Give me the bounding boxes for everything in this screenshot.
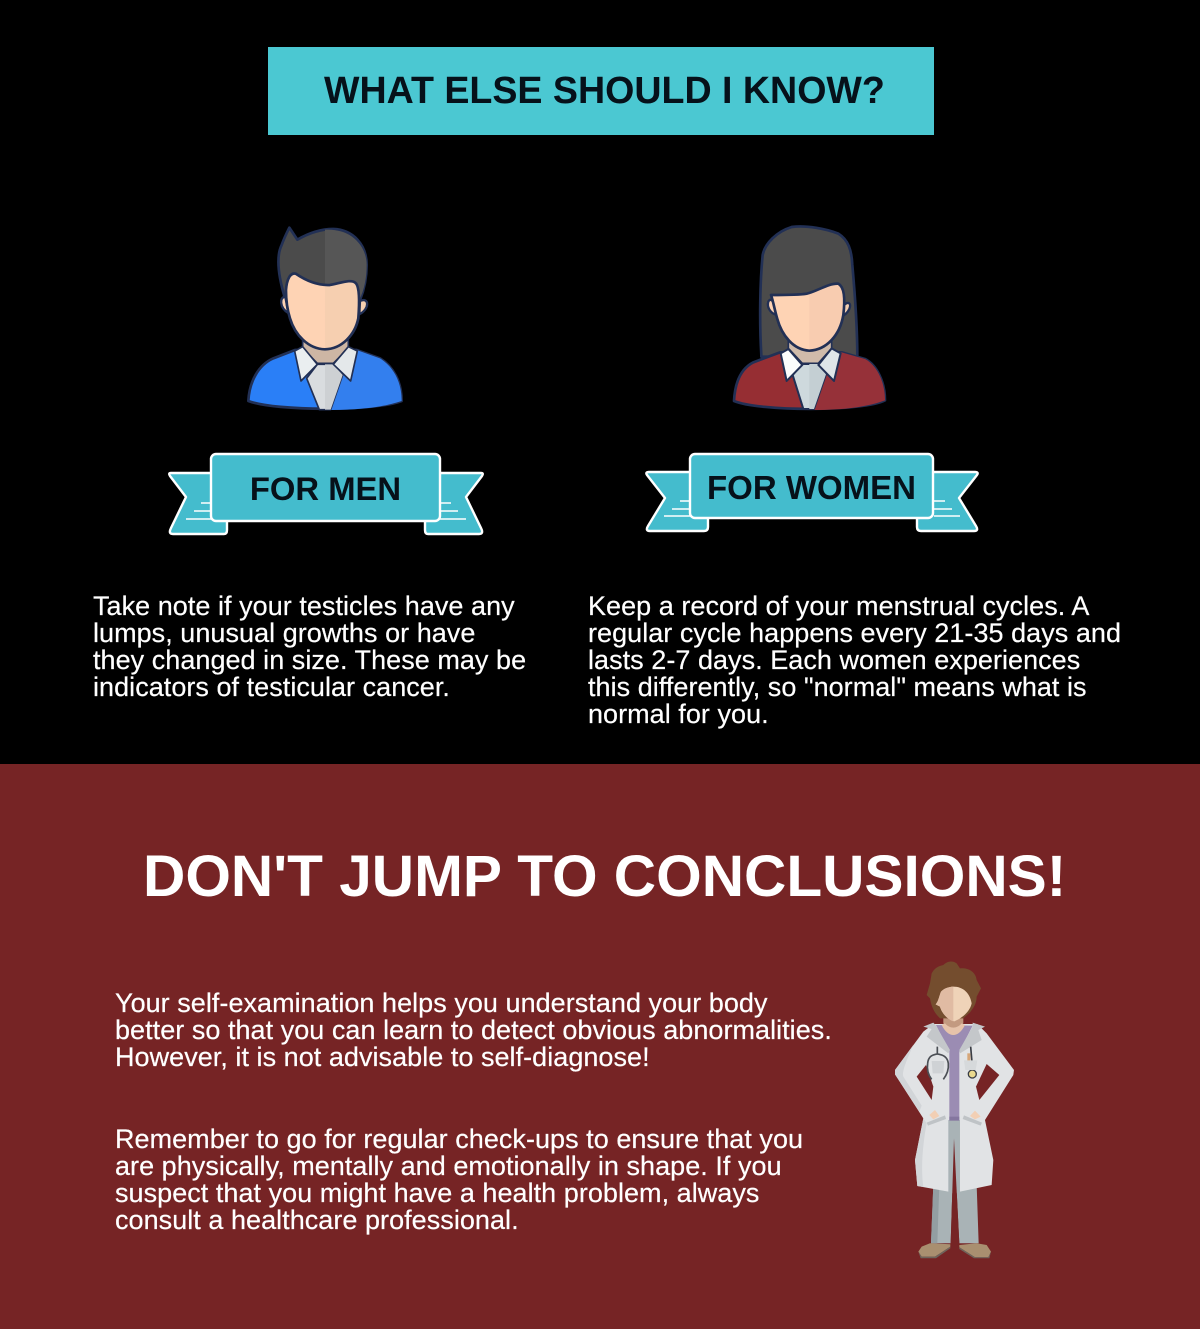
text block: self-examination (115, 988, 832, 1072)
title banner (268, 47, 934, 135)
coat (895, 1024, 1014, 1192)
collar (923, 1023, 985, 1053)
text block: self-examination: However, it is not advisable to self-diagnose! (115, 1042, 650, 1072)
label: for men: FOR MEN (250, 470, 401, 507)
text block: men advice: Take note if your testicles have any (93, 591, 515, 621)
title text: WHAT ELSE SHOULD I KNOW? (324, 69, 885, 111)
text block: self-examination: better so that you can learn to detect obvious abnormalities. (115, 1015, 832, 1045)
text block: regular check-ups: are physically, mentally and emotionally in shape. If you (115, 1151, 782, 1181)
label: for women: FOR WOMEN (707, 469, 916, 506)
stethoscope (927, 1047, 973, 1079)
text block: regular check-ups: consult a healthcare professional. (115, 1205, 519, 1235)
text block: regular check-ups: Remember to go for regular check-ups to ensure that you (115, 1124, 803, 1154)
shoes (918, 1243, 991, 1258)
trousers (931, 1120, 979, 1243)
text block: self-examination: Your self-examination helps you understand your body (115, 988, 768, 1018)
text block: regular check-ups (115, 1124, 803, 1235)
text block: women advice: lasts 2-7 days. Each women experiences (588, 645, 1080, 675)
text block: men advice: lumps, unusual growths or have (93, 618, 475, 648)
text block: women advice (588, 591, 1121, 729)
text block: regular check-ups: suspect that you might have a health problem, always (115, 1178, 759, 1208)
stethoscope chest piece (968, 1070, 976, 1078)
pockets (932, 1053, 977, 1073)
inner shirt (936, 1025, 973, 1121)
heading: don't jump to conclusions: DON'T JUMP TO CONCLUSIONS! (143, 844, 1066, 909)
text block: women advice: this differently, so "normal" means what is (588, 672, 1087, 702)
text block: men advice: they changed in size. These may be (93, 645, 526, 675)
text block: women advice: normal for you. (588, 699, 769, 729)
text block: women advice: Keep a record of your menstrual cycles. A (588, 591, 1089, 621)
text block: men advice: indicators of testicular cancer. (93, 672, 450, 702)
hands and lower pockets (927, 1110, 982, 1126)
panel: bottom maroon section background (0, 764, 1200, 1329)
text block: men advice (93, 591, 526, 702)
text block: women advice: regular cycle happens every 21-35 days and (588, 618, 1121, 648)
head (927, 962, 981, 1035)
